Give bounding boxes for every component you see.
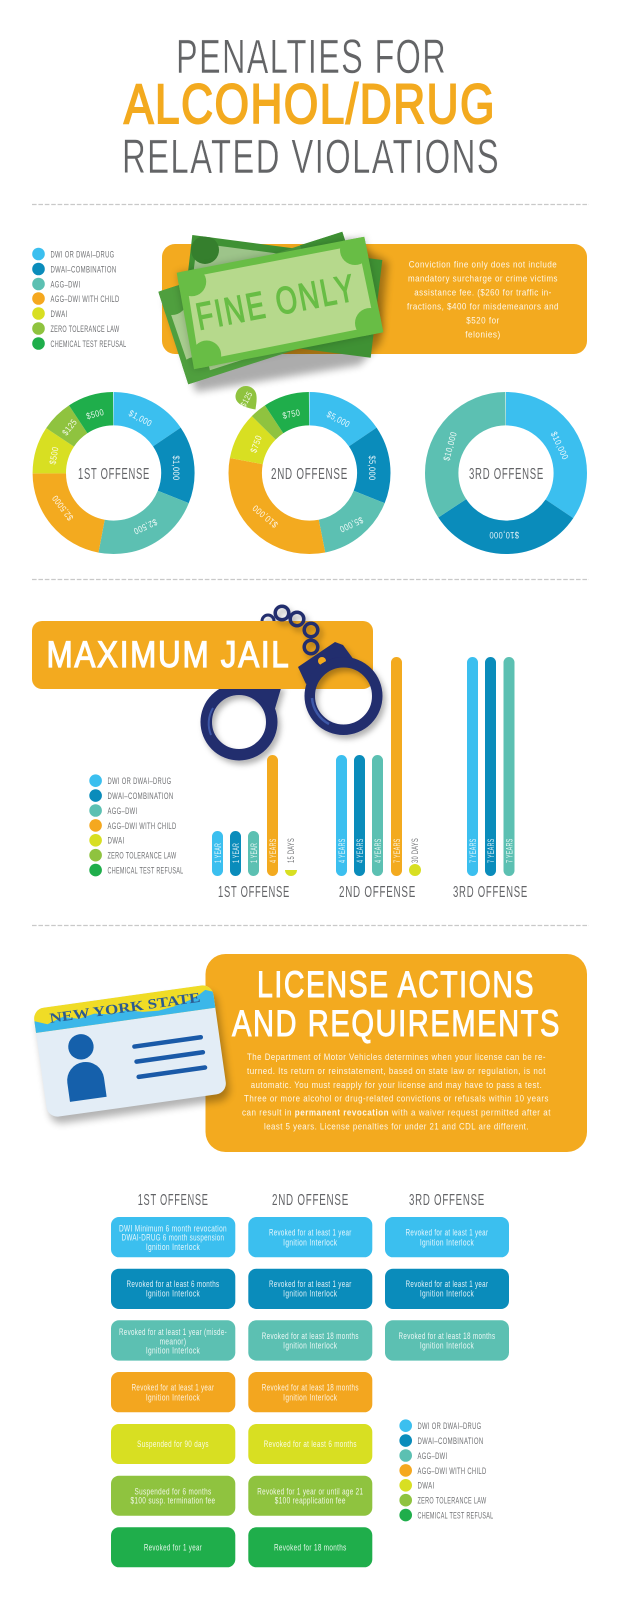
table column: 1st offense xyxy=(111,1217,235,1567)
icon: fine only banknotes xyxy=(157,232,388,392)
table column: 2nd offense: Revoked for at least 18 months xyxy=(262,1331,359,1342)
bar chart: 1st offense jail: 1 YEAR xyxy=(213,843,223,863)
bar chart: 1st offense jail: 15 DAYS xyxy=(286,838,296,863)
donut chart: 2nd offense: $5,000 xyxy=(367,456,377,480)
table column: 1st offense: Suspended for 6 months xyxy=(134,1487,212,1498)
text: license note: Three or more alcohol or drug-related convictions or refusals within 10 years xyxy=(244,1094,549,1104)
donut chart: 1st offense: $125 xyxy=(60,417,79,437)
donut chart: 3rd offense xyxy=(441,409,571,540)
legend: fine section: DWAI xyxy=(50,309,68,319)
bar chart: 1st offense jail: 1 YEAR xyxy=(249,843,259,863)
table column: 2nd offense: Revoked for at least 18 months xyxy=(262,1383,359,1394)
table column: 2nd offense: Ignition Interlock xyxy=(283,1237,337,1248)
table column: 2nd offense: $100 reapplication fee xyxy=(275,1496,346,1507)
table column: 1st offense: DWI Minimum 6 month revocation xyxy=(119,1223,227,1234)
legend: jail section: DWAI–COMBINATION xyxy=(108,791,174,801)
legend: jail section: AGG–DWI WITH CHILD xyxy=(108,821,176,831)
table column: 1st offense: Suspended for 90 days xyxy=(137,1439,209,1450)
text: license note: can result in permanent revocation with a waiver request permitted after at xyxy=(242,1108,551,1118)
table column: 1st offense: Ignition Interlock xyxy=(146,1392,200,1403)
legend: jail section: CHEMICAL TEST REFUSAL xyxy=(108,866,184,876)
text: license note: least 5 years. License penalties for under 21 and CDL are different. xyxy=(264,1122,529,1132)
table column: 3rd offense: Revoked for at least 18 months xyxy=(398,1331,496,1342)
donut chart: 2nd offense: $10,000 xyxy=(250,503,280,530)
legend: license section: DWAI–COMBINATION xyxy=(418,1436,484,1446)
bar chart: 1st offense jail: 1 YEAR xyxy=(231,843,241,863)
text: fine note: fractions, $400 for misdemeanors and xyxy=(407,302,559,312)
donut chart: 1st offense: $1,000 xyxy=(127,408,154,429)
bar chart: 3rd offense jail: 7 YEARS xyxy=(504,838,514,863)
donut chart: 2nd offense: $750 xyxy=(282,407,301,421)
table column: 3rd offense xyxy=(385,1217,509,1361)
legend: license section: DWAI xyxy=(418,1480,434,1490)
donut chart: 1st offense: $500 xyxy=(48,446,61,465)
bar chart: 2nd offense jail: 7 YEARS xyxy=(392,838,402,863)
legend: jail section: AGG–DWI xyxy=(108,806,138,816)
legend: license section: AGG–DWI WITH CHILD xyxy=(418,1466,486,1476)
bar chart: 2nd offense jail: 4 YEARS xyxy=(355,838,365,863)
table column: 1st offense: Revoked for at least 1 year xyxy=(132,1383,214,1394)
text: fine note: felonies) xyxy=(465,330,501,340)
icon: New York State license card xyxy=(32,984,231,1125)
icon: handcuffs chain and right cuff xyxy=(275,606,377,730)
bar chart: 1st offense jail: 4 YEARS xyxy=(268,838,278,863)
heading: license actions xyxy=(232,964,561,1044)
text: fine note: mandatory surcharge or crime victims xyxy=(408,274,558,284)
table column: 1st offense: Revoked for 1 year xyxy=(144,1543,202,1554)
table column: 1st offense: $100 susp. termination fee xyxy=(130,1496,216,1507)
donut chart: 2nd offense: 2ND OFFENSE xyxy=(271,466,348,483)
donut chart: 3rd offense: $10,000 xyxy=(489,530,519,540)
donut chart: 2nd offense: $5,000 xyxy=(338,515,365,535)
table column: 3rd offense: Revoked for at least 1 year xyxy=(406,1228,488,1239)
bar chart: 2nd offense jail: 2ND OFFENSE xyxy=(339,884,416,901)
legend: fine section: DWI OR DWAI–DRUG xyxy=(50,250,114,260)
text: fine note: Conviction fine only does not include xyxy=(409,260,557,270)
callout: $125 pin: $125 xyxy=(238,390,255,409)
bar chart: 3rd offense jail: 3RD OFFENSE xyxy=(453,884,528,901)
text: fine note: $520 for xyxy=(466,316,500,326)
text: license note: automatic. You must reapply for your license and may have to pass a test. xyxy=(251,1080,542,1091)
title: ALCOHOL/DRUG xyxy=(124,72,496,135)
label: fine only: FINE ONLY xyxy=(193,267,360,339)
legend: jail section xyxy=(89,774,184,876)
legend: license section: CHEMICAL TEST REFUSAL xyxy=(418,1510,494,1520)
bar chart: 3rd offense jail: 7 YEARS xyxy=(468,838,478,863)
table column: 2nd offense: Ignition Interlock xyxy=(283,1288,337,1299)
panel: maximum jail heading xyxy=(32,621,373,689)
legend: jail section: ZERO TOLERANCE LAW xyxy=(108,850,177,860)
table heading: 3rd offense: 3RD OFFENSE xyxy=(409,1192,485,1209)
panel: maximum jail heading: MAXIMUM JAIL xyxy=(46,634,290,675)
bar chart: 3rd offense jail: 7 YEARS xyxy=(486,838,496,863)
table column: 3rd offense: Ignition Interlock xyxy=(420,1237,474,1248)
bar chart: 3rd offense jail xyxy=(453,657,528,901)
donut chart: 1st offense: $1,000 xyxy=(171,456,181,480)
donut chart: 1st offense: 1ST OFFENSE xyxy=(78,466,150,483)
bar chart: 1st offense jail: 1ST OFFENSE xyxy=(218,884,290,901)
legend: fine section: ZERO TOLERANCE LAW xyxy=(50,324,120,334)
table heading: 1st offense: 1ST OFFENSE xyxy=(138,1192,209,1209)
table column: 3rd offense: Revoked for at least 1 year xyxy=(406,1279,488,1290)
table column: 1st offense: Ignition Interlock xyxy=(146,1288,200,1299)
icon: person xyxy=(61,1032,107,1102)
donut chart: 1st offense: $500 xyxy=(85,407,105,421)
icon: handcuffs left ring (behind panel) xyxy=(206,615,282,755)
legend: fine section: AGG–DWI xyxy=(50,280,80,290)
bar chart: 1st offense jail xyxy=(212,755,297,901)
bar chart: 2nd offense jail: 4 YEARS xyxy=(373,838,383,863)
donut chart: 2nd offense xyxy=(235,386,377,537)
table column: 1st offense: Revoked for at least 1 year (misde- xyxy=(119,1327,227,1338)
text: license note: The Department of Motor Vehicles determines when your license can be re- xyxy=(247,1052,546,1063)
legend: license section: DWI OR DWAI–DRUG xyxy=(418,1421,482,1431)
title: PENALTIES FOR xyxy=(176,31,447,84)
icon: New York State license card: NEW YORK STATE xyxy=(49,991,201,1027)
heading: license actions: LICENSE ACTIONS xyxy=(257,964,535,1005)
table column: 2nd offense: Ignition Interlock xyxy=(283,1392,337,1403)
legend: jail section: DWI OR DWAI–DRUG xyxy=(108,776,172,786)
donut chart: 3rd offense: 3RD OFFENSE xyxy=(469,466,544,483)
table column: 1st offense: Ignition Interlock xyxy=(146,1346,200,1357)
text: license note xyxy=(242,1052,551,1132)
legend: fine section: CHEMICAL TEST REFUSAL xyxy=(50,339,126,349)
table column: 1st offense: Revoked for at least 6 months xyxy=(126,1279,220,1290)
text: license note: turned. Its return or reinstatement, based on state law or regulation, is not xyxy=(247,1066,546,1077)
table column: 2nd offense: Ignition Interlock xyxy=(283,1340,337,1351)
title xyxy=(122,31,500,184)
table column: 3rd offense: Ignition Interlock xyxy=(420,1288,474,1299)
table column: 1st offense: DWAI-DRUG 6 month suspension xyxy=(122,1233,224,1244)
donut chart: 1st offense: $2,500 xyxy=(132,517,159,537)
table column: 1st offense: meanor) xyxy=(160,1336,186,1347)
donut chart: 1st offense xyxy=(48,407,181,537)
bar chart: 2nd offense jail: 30 DAYS xyxy=(410,838,420,863)
text: fine note xyxy=(407,260,559,340)
text: fine note: assistance fee. ($260 for traffic in- xyxy=(414,288,552,298)
legend: license section: AGG–DWI xyxy=(418,1451,448,1461)
table column: 2nd offense: Revoked for 18 months xyxy=(274,1543,347,1554)
table column: 2nd offense: Revoked for at least 6 months xyxy=(264,1439,357,1450)
table column: 2nd offense: Revoked for at least 1 year xyxy=(269,1228,352,1239)
bar chart: 2nd offense jail: 4 YEARS xyxy=(337,838,347,863)
donut chart: 3rd offense: $10,000 xyxy=(549,430,571,461)
bar chart: 2nd offense jail xyxy=(336,657,421,901)
legend: license section xyxy=(399,1419,494,1521)
table column: 1st offense: Ignition Interlock xyxy=(146,1242,200,1253)
donut chart: 3rd offense: $10,000 xyxy=(441,430,459,462)
legend: jail section: DWAI xyxy=(108,836,124,846)
legend: fine section: DWAI–COMBINATION xyxy=(50,264,116,274)
table column: 2nd offense: Revoked for 1 year or until age 21 xyxy=(257,1487,363,1498)
donut chart: 1st offense: $2,5000 xyxy=(50,493,75,522)
panel: license actions and requirements xyxy=(206,954,587,1152)
table column: 2nd offense: Revoked for at least 1 year xyxy=(269,1279,352,1290)
table column: 2nd offense xyxy=(248,1217,372,1567)
table heading: 2nd offense: 2ND OFFENSE xyxy=(272,1192,349,1209)
legend: license section: ZERO TOLERANCE LAW xyxy=(418,1496,487,1506)
table column: 3rd offense: Ignition Interlock xyxy=(420,1340,474,1351)
legend: fine section xyxy=(32,248,127,350)
legend: fine section: AGG–DWI WITH CHILD xyxy=(50,294,120,304)
donut chart: 2nd offense: $5,000 xyxy=(325,409,352,430)
panel: fine only xyxy=(162,244,587,354)
donut chart: 2nd offense: $750 xyxy=(248,434,264,454)
